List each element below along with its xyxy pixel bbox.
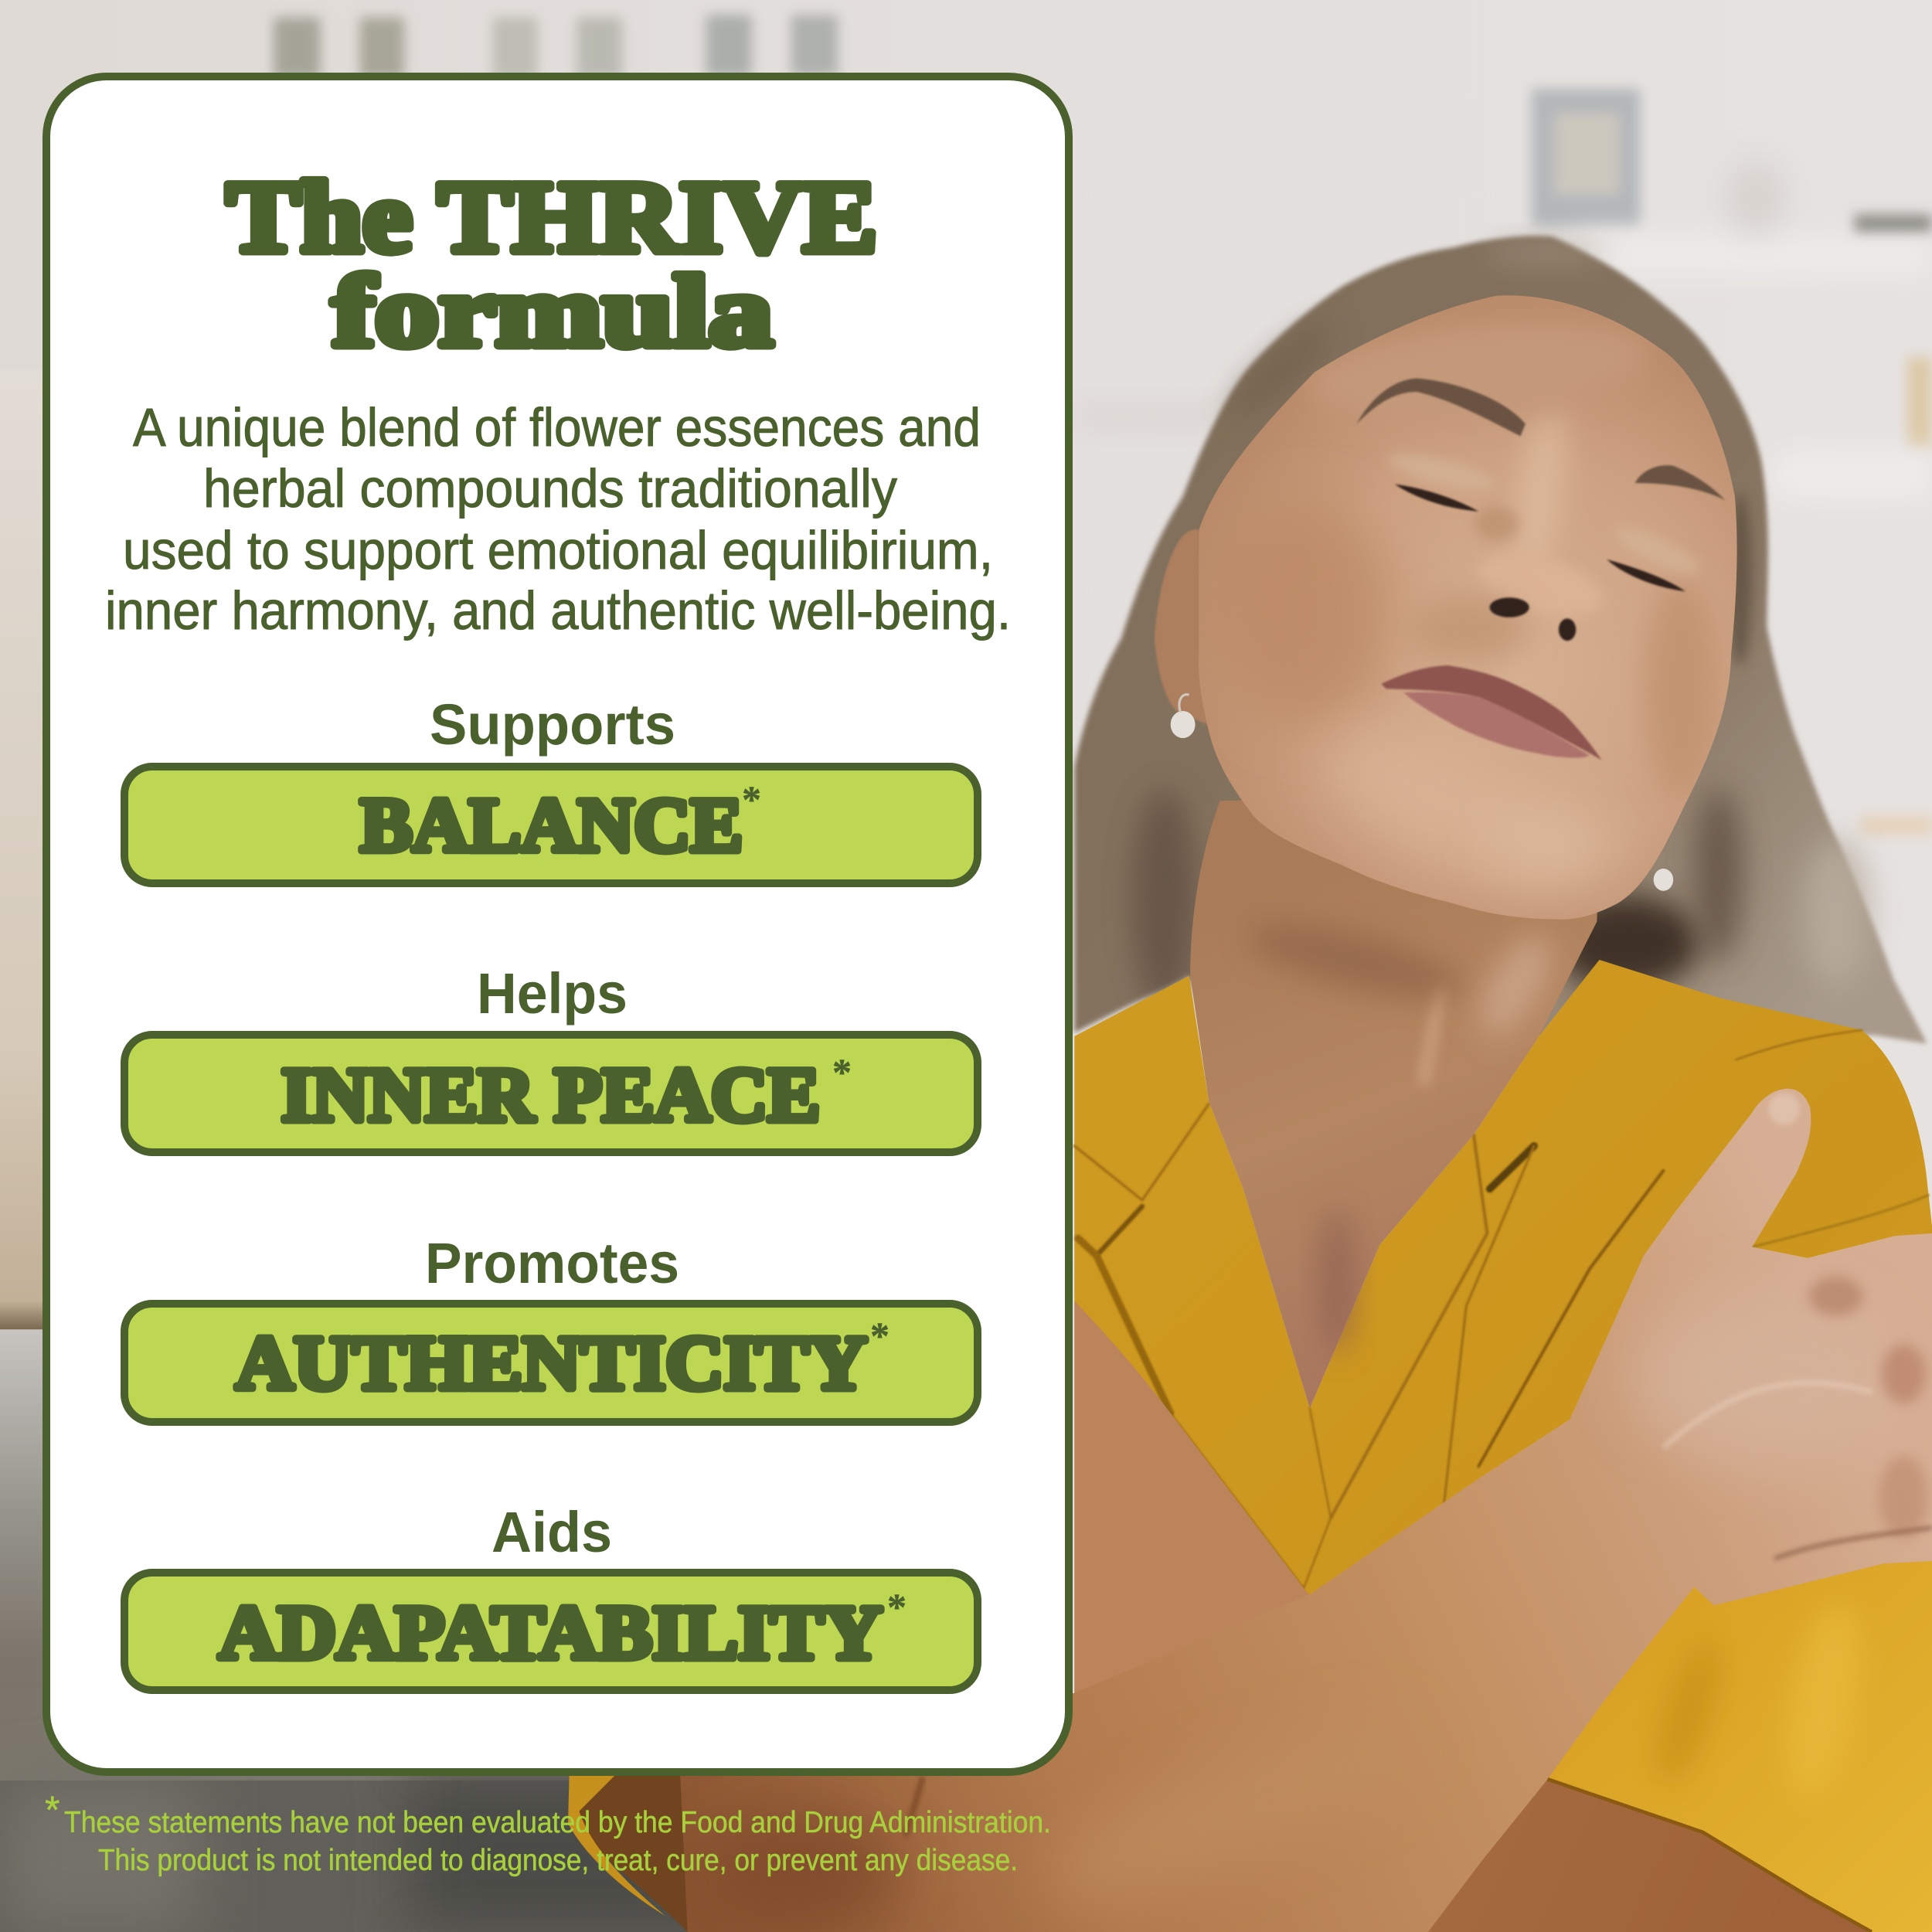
closed eyes (1395, 485, 1685, 591)
title: The THRIVE (226, 160, 877, 274)
benefit: adaptability: * (887, 1585, 906, 1628)
lower arm (1428, 1779, 1872, 1932)
intro paragraph (105, 397, 1011, 641)
benefit: balance: * (742, 777, 761, 821)
benefit: inner peace: Helps (477, 961, 628, 1026)
ear (1155, 529, 1213, 727)
nose (1490, 597, 1576, 641)
benefit: adaptability (124, 1500, 978, 1690)
lips (1381, 665, 1602, 760)
eyebrows (1356, 378, 1725, 500)
back forearm (1074, 1301, 1325, 1725)
face (1199, 295, 1737, 920)
shirt (1074, 960, 1932, 1932)
shirt collar and folds (1074, 1030, 1928, 1588)
benefit: authenticity: * (870, 1314, 889, 1357)
benefit: inner peace: * (832, 1050, 852, 1094)
title (226, 160, 877, 368)
intro paragraph: used to support emotional equilibirium, (123, 520, 993, 580)
crossing forearm and hand (675, 1089, 1932, 1932)
blurred shelf and picture frame (1074, 89, 1932, 835)
footnote disclaimer: This product is not intended to diagnose, treat, cure, or prevent any disease. (98, 1844, 1018, 1877)
benefit: authenticity: AUTHENTICITY (236, 1320, 867, 1406)
benefit: adaptability: Aids (492, 1500, 612, 1564)
benefit: adaptability: ADAPATABILITY (219, 1590, 883, 1675)
hair (1074, 236, 1927, 1060)
card panel (46, 77, 1069, 1772)
shirt bottom right fold (1548, 1561, 1932, 1932)
benefit: authenticity: Promotes (425, 1231, 679, 1295)
blurred windows at top (274, 15, 838, 79)
neck (1190, 788, 1602, 1408)
intro paragraph: inner harmony, and authentic well-being. (105, 580, 1011, 641)
benefit: inner peace (124, 961, 978, 1152)
intro paragraph: A unique blend of flower essences and (133, 397, 981, 457)
earrings (1171, 695, 1673, 891)
footnote disclaimer: * (45, 1788, 60, 1832)
title: formula (332, 254, 773, 368)
benefit: balance (124, 692, 978, 883)
benefit: authenticity (124, 1231, 978, 1422)
footnote disclaimer (45, 1788, 1051, 1877)
footnote disclaimer: These statements have not been evaluated by the Food and Drug Administration. (64, 1806, 1051, 1839)
intro paragraph: herbal compounds traditionally (203, 458, 897, 519)
benefit: inner peace: INNER PEACE (281, 1052, 820, 1138)
sleeve tip below card (568, 1774, 688, 1932)
benefit: balance: BALANCE (360, 782, 743, 868)
benefit: balance: Supports (430, 692, 675, 757)
